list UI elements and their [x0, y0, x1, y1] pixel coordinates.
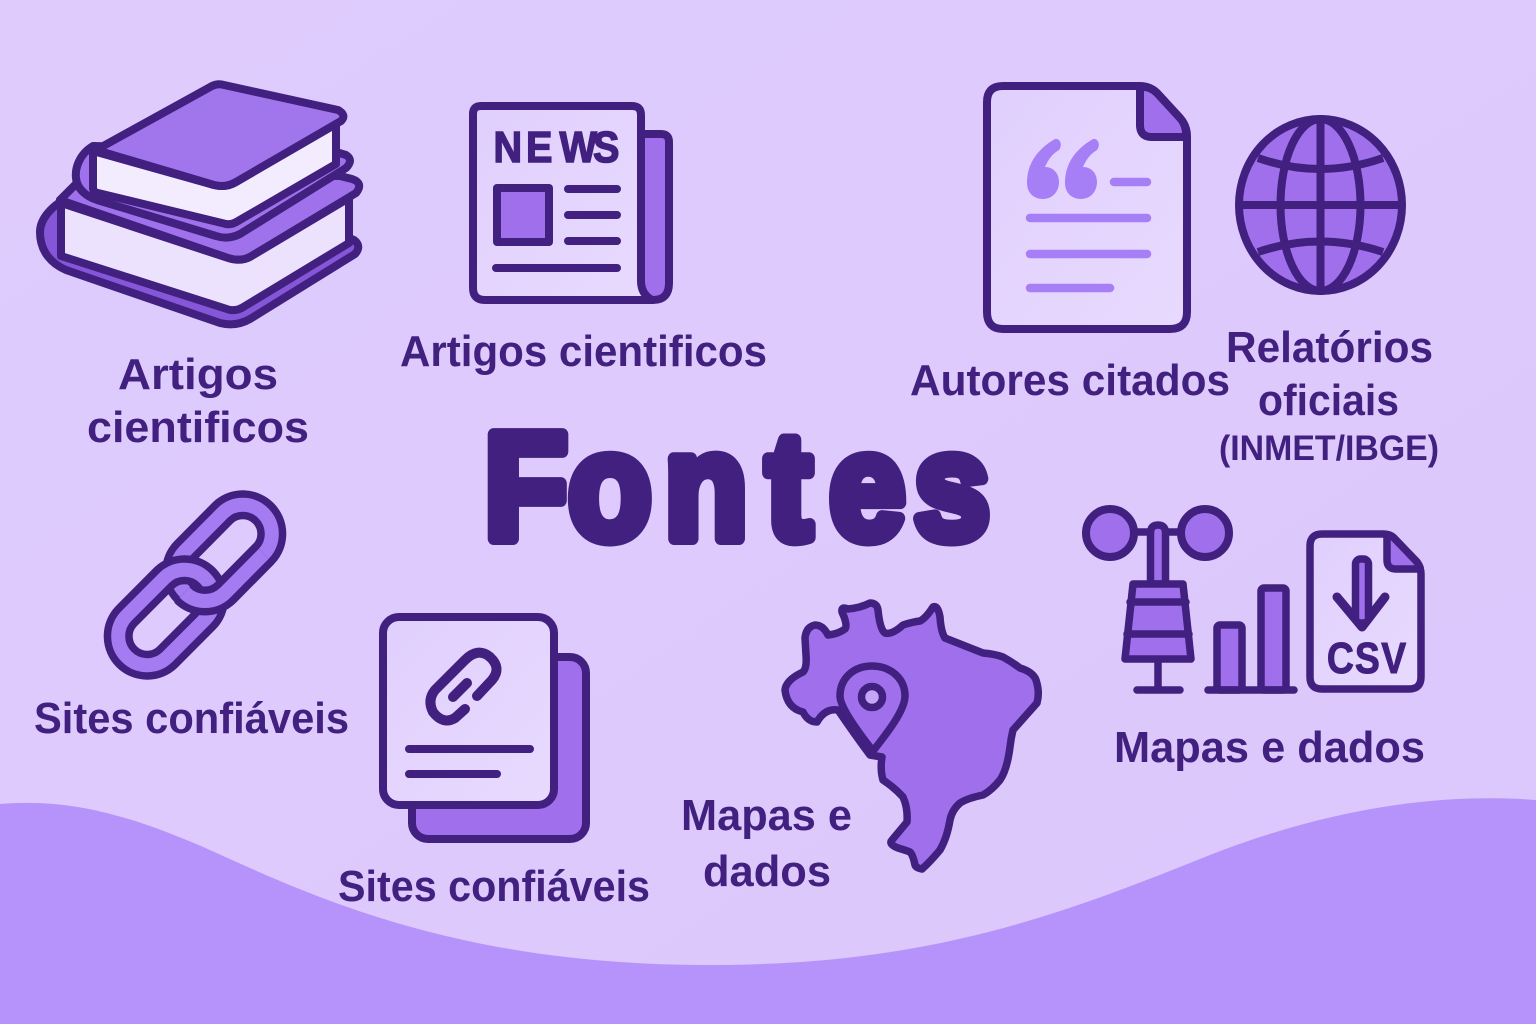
label: Sites confiáveis (bottom): Sites confiáveis — [338, 862, 650, 911]
icon: stacked books — [40, 84, 359, 324]
icon: chain link — [118, 505, 272, 665]
icon: anemometer — [1086, 509, 1229, 690]
icon: linked pages — [383, 617, 586, 839]
label: Mapas e dados (center) — [681, 791, 852, 896]
label: Artigos cientificos (left): cientificos — [87, 403, 309, 452]
CSV file text: CSV — [1327, 633, 1406, 683]
icon: globe — [1239, 119, 1402, 291]
icon: bar chart — [1208, 588, 1294, 690]
icon: newspaper — [473, 106, 669, 300]
label: Artigos cientificos (left) — [87, 350, 309, 452]
label: Relatórios oficiais (INMET/IBGE) — [1219, 323, 1439, 468]
icon: map of Brazil with pin — [785, 603, 1038, 869]
label: Relatórios oficiais (INMET/IBGE): (INMET/IBGE) — [1219, 429, 1439, 468]
label: Artigos cientificos (top): Artigos cientificos — [400, 327, 767, 376]
newspaper heading: NEWS — [493, 122, 619, 171]
label: Sites confiáveis (left): Sites confiáveis — [34, 694, 349, 743]
label: Relatórios oficiais (INMET/IBGE): oficiais — [1258, 376, 1399, 425]
label: Mapas e dados (right): Mapas e dados — [1114, 723, 1425, 772]
title: Fontes — [484, 403, 990, 571]
wave footer — [0, 798, 1536, 1024]
label: Artigos cientificos (left): Artigos — [118, 350, 278, 399]
label: Mapas e dados (center): dados — [703, 847, 831, 896]
icon: CSV file — [1310, 534, 1421, 689]
label: Mapas e dados (center): Mapas e — [681, 791, 852, 840]
icon: cited document — [987, 86, 1187, 329]
label: Autores citados: Autores citados — [910, 356, 1230, 405]
label: Relatórios oficiais (INMET/IBGE): Relatórios — [1226, 323, 1433, 372]
